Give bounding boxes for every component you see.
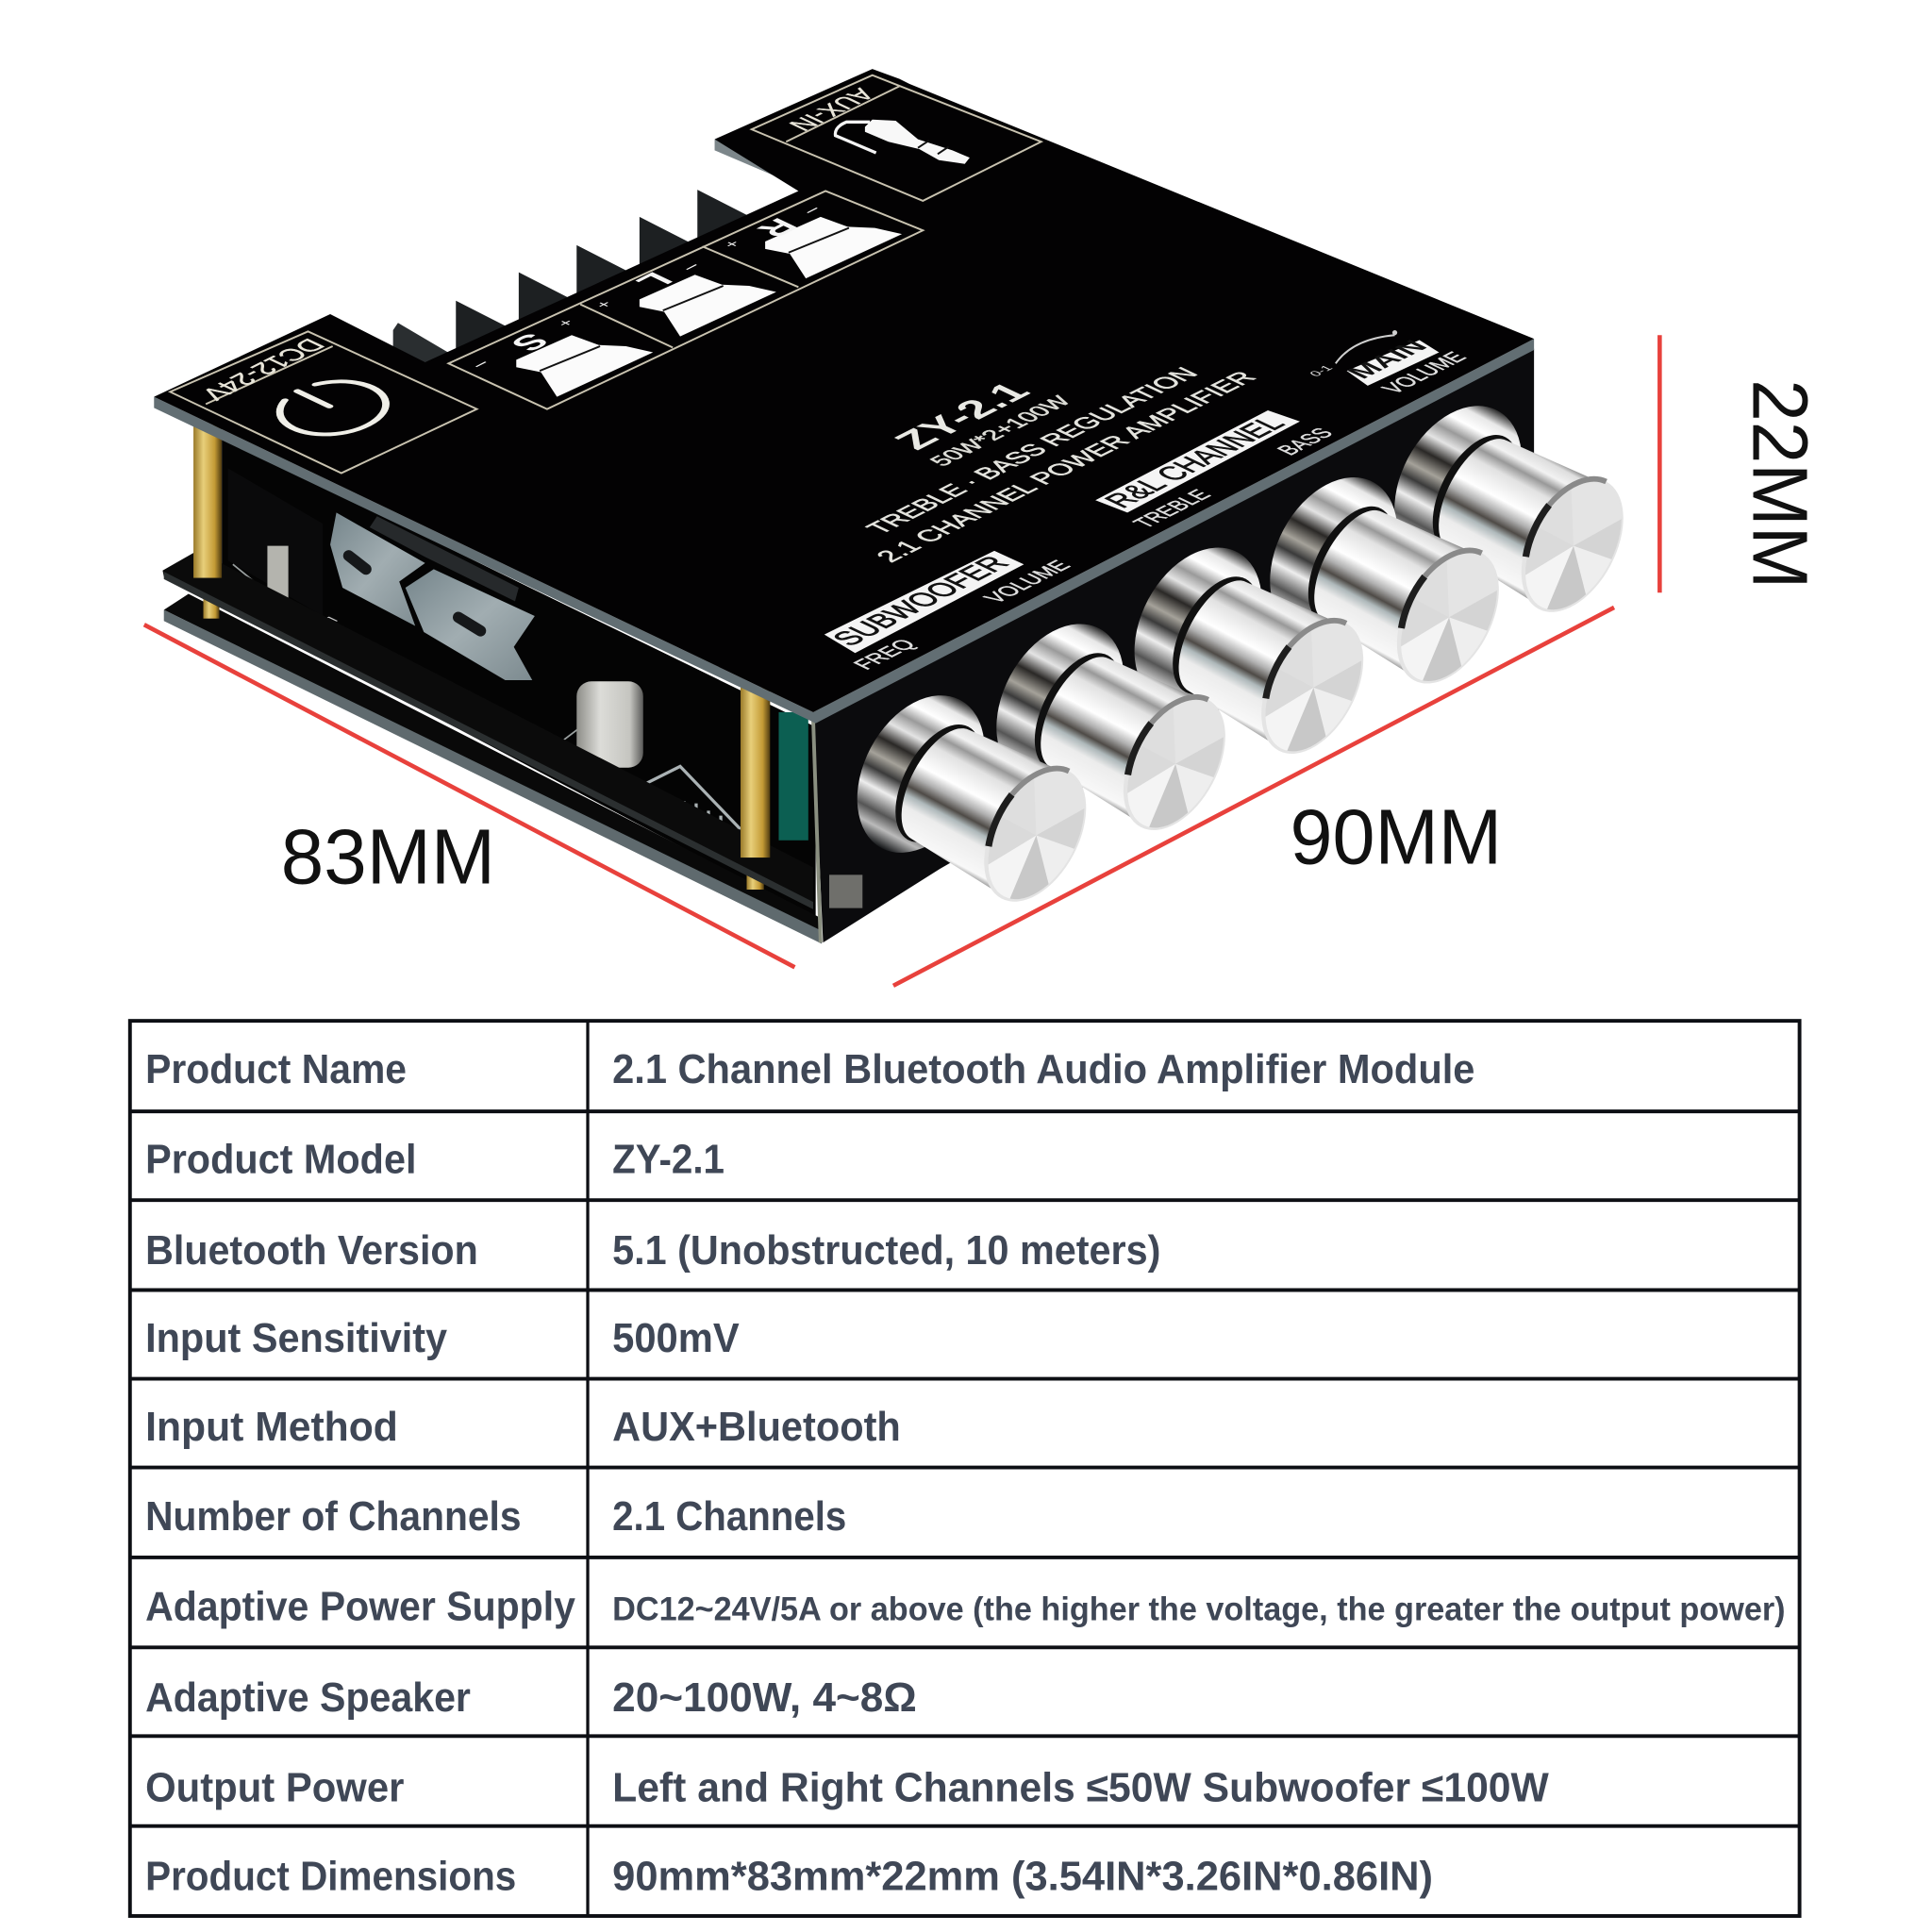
icon: audio jack [835,120,970,164]
power box outline [170,331,476,474]
SUBWOOFER label: SUBWOOFER [824,552,1017,650]
capacitor top band [370,516,519,601]
knob 1: subwoofer freq [831,674,1119,932]
electrolytic capacitor [576,681,643,768]
speaker icon R: − [796,203,828,218]
R&L CHANNEL label [1095,410,1300,512]
silkscreen label: LK1 [302,614,341,634]
speaker icon R [719,203,902,278]
label: AUX-IN: AUX-IN [782,85,881,134]
knob label BASS: BASS [1273,425,1339,458]
knob label VOLUME: VOLUME [979,558,1076,606]
speaker icon S: − [465,357,496,372]
speaker icon S [465,316,653,397]
knob label TREBLE: TREBLE [1128,487,1217,531]
knob 2: subwoofer volume [971,602,1258,861]
AUX tab edge [715,140,808,190]
row: Output Power: Left and Right Channels ≤50W Subwoofer ≤100W [612,1766,1549,1811]
speaker icon L [591,259,776,337]
row: Bluetooth Version: 5.1 (Unobstructed, 10 meters) [612,1228,1160,1274]
knob label main VOLUME: VOLUME [1377,349,1472,396]
dimension: 22MM: 22MM [1737,379,1823,589]
dimension: 90MM [893,608,1614,986]
row: Number of Channels: 2.1 Channels [612,1494,846,1540]
dark component body [228,468,323,616]
silkscreen outline [233,564,589,752]
green PCB [778,712,808,841]
front panel [813,349,1534,942]
row: Output Power: Output Power [145,1766,405,1811]
row: Bluetooth Version [145,1228,1160,1274]
speaker icon L: L [628,268,681,293]
lower brass pin right [747,862,764,890]
knob 4: bass [1244,456,1532,714]
speaker terminals box [448,191,923,409]
row: Input Method: Input Method [145,1405,398,1450]
row: Number of Channels [145,1494,846,1540]
row: Product Dimensions [145,1855,1433,1900]
row: Input Method [145,1405,901,1450]
board title ZY-2.1: ZY-2.1 [884,377,1040,455]
row: Input Sensitivity: Input Sensitivity [145,1316,447,1361]
speaker icon S: + [552,316,578,329]
silver component [267,546,289,600]
middle board [162,551,813,909]
knob 3: treble [1108,525,1396,785]
interior side opening [222,438,816,918]
top board edge [154,339,1534,724]
row: Product Model: ZY-2.1 [612,1137,724,1182]
row: Input Sensitivity: 500mV [612,1316,740,1361]
label: DC12-24V: DC12-24V [193,335,332,404]
dimension: 90MM: 90MM [1291,795,1502,881]
amplifier board illustration [154,69,1657,943]
speaker icon R: R [749,214,806,242]
row: Adaptive Power Supply [145,1585,1786,1630]
row: Adaptive Power Supply: Adaptive Power Supply [145,1585,575,1630]
board rating: 50W*2+100W [925,393,1077,469]
row: Adaptive Speaker [145,1675,917,1721]
board subtitle 1: TREBLE · BASS REGULATION [860,364,1205,538]
row: Product Model [145,1137,724,1182]
row: Input Sensitivity [145,1316,740,1361]
volume arc: 0-1 [1307,363,1336,378]
speaker icon S: S [503,329,558,356]
brass standoff right [741,688,770,858]
row: Input Method: AUX+Bluetooth [612,1405,901,1450]
knob label FREQ: FREQ [849,637,922,673]
lower brass pin left [204,578,219,619]
knob 5: main volume [1369,384,1657,643]
R&L CHANNEL label: R&L CHANNEL [1097,412,1292,512]
SUBWOOFER label [824,551,1024,653]
bottom board [164,594,822,943]
top board [154,69,1534,712]
board subtitle 2: 2.1 CHANNEL POWER AMPLIFIER [870,368,1263,566]
capacitors [330,512,535,680]
table grid [129,1020,1800,1916]
speaker icon L: + [591,298,617,310]
icon: power [258,371,408,445]
small chip area [631,766,740,850]
heatsink fins [393,190,756,367]
volume arc [1307,330,1397,378]
row: Product Name [145,1047,1474,1092]
row: Product Name: 2.1 Channel Bluetooth Audio Amplifier Module [612,1047,1474,1092]
row: Product Model: Product Model [145,1137,416,1182]
row: Number of Channels: Number of Channels [145,1494,521,1540]
row: Product Dimensions: 90mm*83mm*22mm (3.54IN*3.26IN*0.86IN) [612,1855,1433,1900]
brass standoff left [193,425,222,578]
row: Adaptive Speaker: Adaptive Speaker [145,1675,471,1721]
row: Product Name: Product Name [145,1047,407,1092]
row: Adaptive Speaker: 20~100W, 4~8Ω [612,1675,917,1721]
speaker icon R: + [719,238,745,250]
row: Product Dimensions: Product Dimensions [145,1855,516,1900]
dimension: 83MM: 83MM [281,814,495,900]
AUX box outline [752,75,1041,201]
dimension: 83MM [144,625,794,967]
row: Adaptive Power Supply: DC12~24V/5A or above (the higher the voltage, the greater the output power) [612,1591,1786,1628]
row: Bluetooth Version: Bluetooth Version [145,1228,478,1274]
row: Output Power [145,1766,1549,1811]
MAIN label: MAIN [1341,336,1434,382]
specification table [129,1020,1800,1916]
speaker icon L: − [675,259,708,275]
